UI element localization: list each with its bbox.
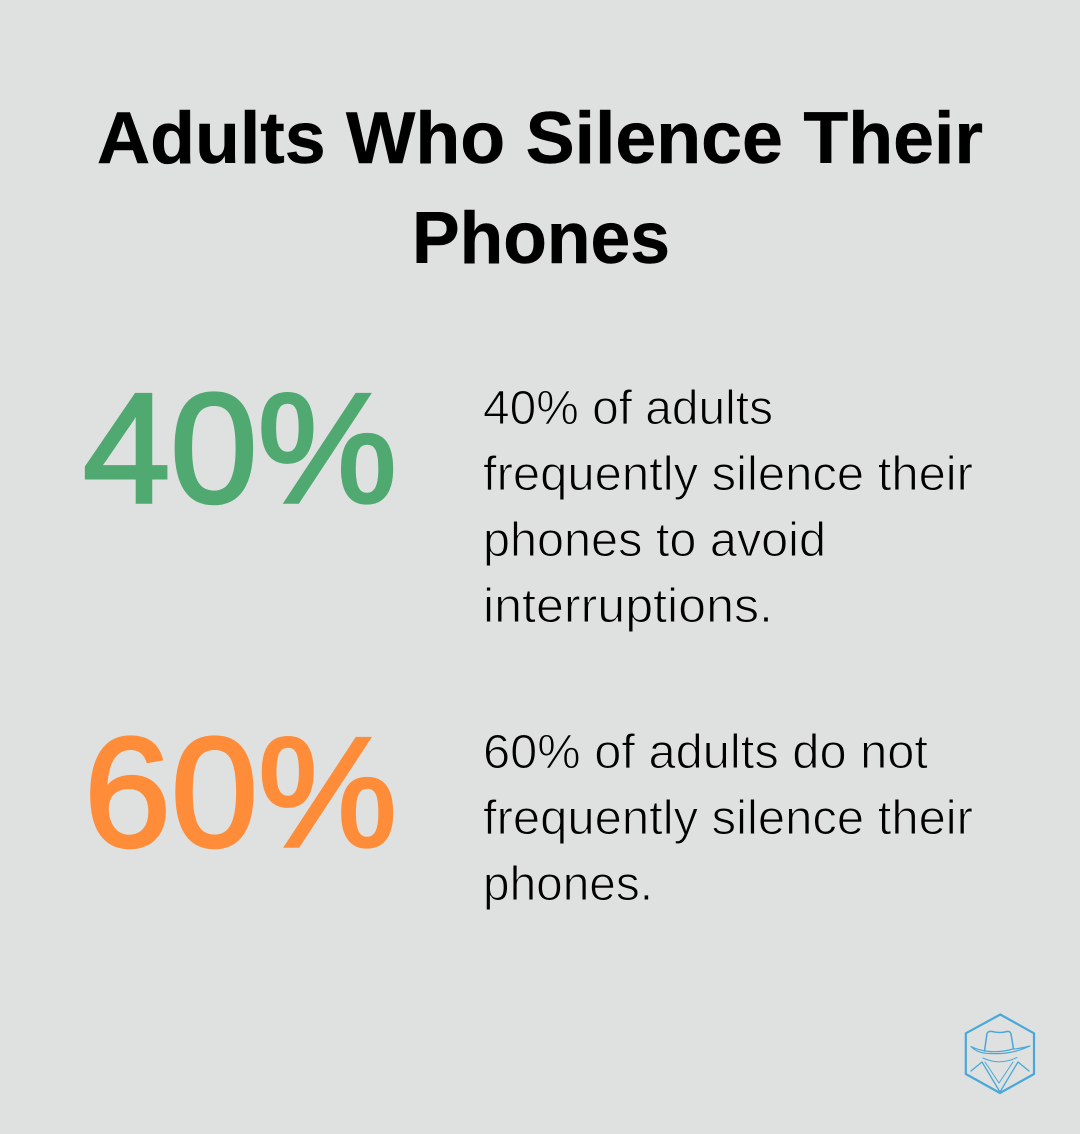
stat number: 40%: 40% bbox=[83, 362, 397, 536]
icon: hexagon spy logo bbox=[966, 1014, 1034, 1093]
stat description: 60%: phones. bbox=[483, 858, 653, 911]
stat: 40% bbox=[83, 362, 973, 633]
stat number: 60%: 60% bbox=[84, 706, 397, 880]
stat description: 40%: frequently silence their bbox=[483, 448, 973, 501]
title bbox=[97, 98, 983, 279]
stat description: 40%: interruptions. bbox=[483, 580, 773, 633]
stat: 60% bbox=[84, 706, 973, 911]
stat description: 40%: 40% of adults bbox=[483, 382, 773, 435]
stat description: 40% bbox=[483, 382, 973, 633]
stat description: 60%: 60% of adults do not bbox=[483, 726, 928, 779]
title: Adults Who Silence Their bbox=[97, 98, 983, 179]
stat description: 40%: phones to avoid bbox=[483, 514, 826, 567]
title: Phones bbox=[412, 198, 670, 279]
stat description: 60%: frequently silence their bbox=[483, 792, 973, 845]
stat description: 60% bbox=[483, 726, 973, 911]
